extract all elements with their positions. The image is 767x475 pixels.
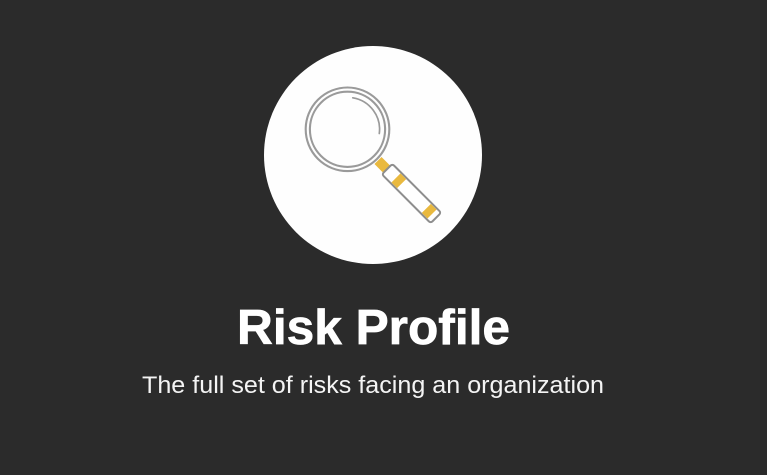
white circle badge bbox=[264, 46, 482, 264]
handle bbox=[382, 164, 441, 223]
title: Risk Profile bbox=[237, 301, 510, 355]
handle neck bbox=[378, 160, 388, 170]
handle bands bbox=[391, 173, 406, 188]
lens rings bbox=[306, 88, 389, 171]
subtitle: The full set of risks facing an organization bbox=[142, 372, 604, 399]
icon: magnifying glass bbox=[306, 88, 441, 223]
